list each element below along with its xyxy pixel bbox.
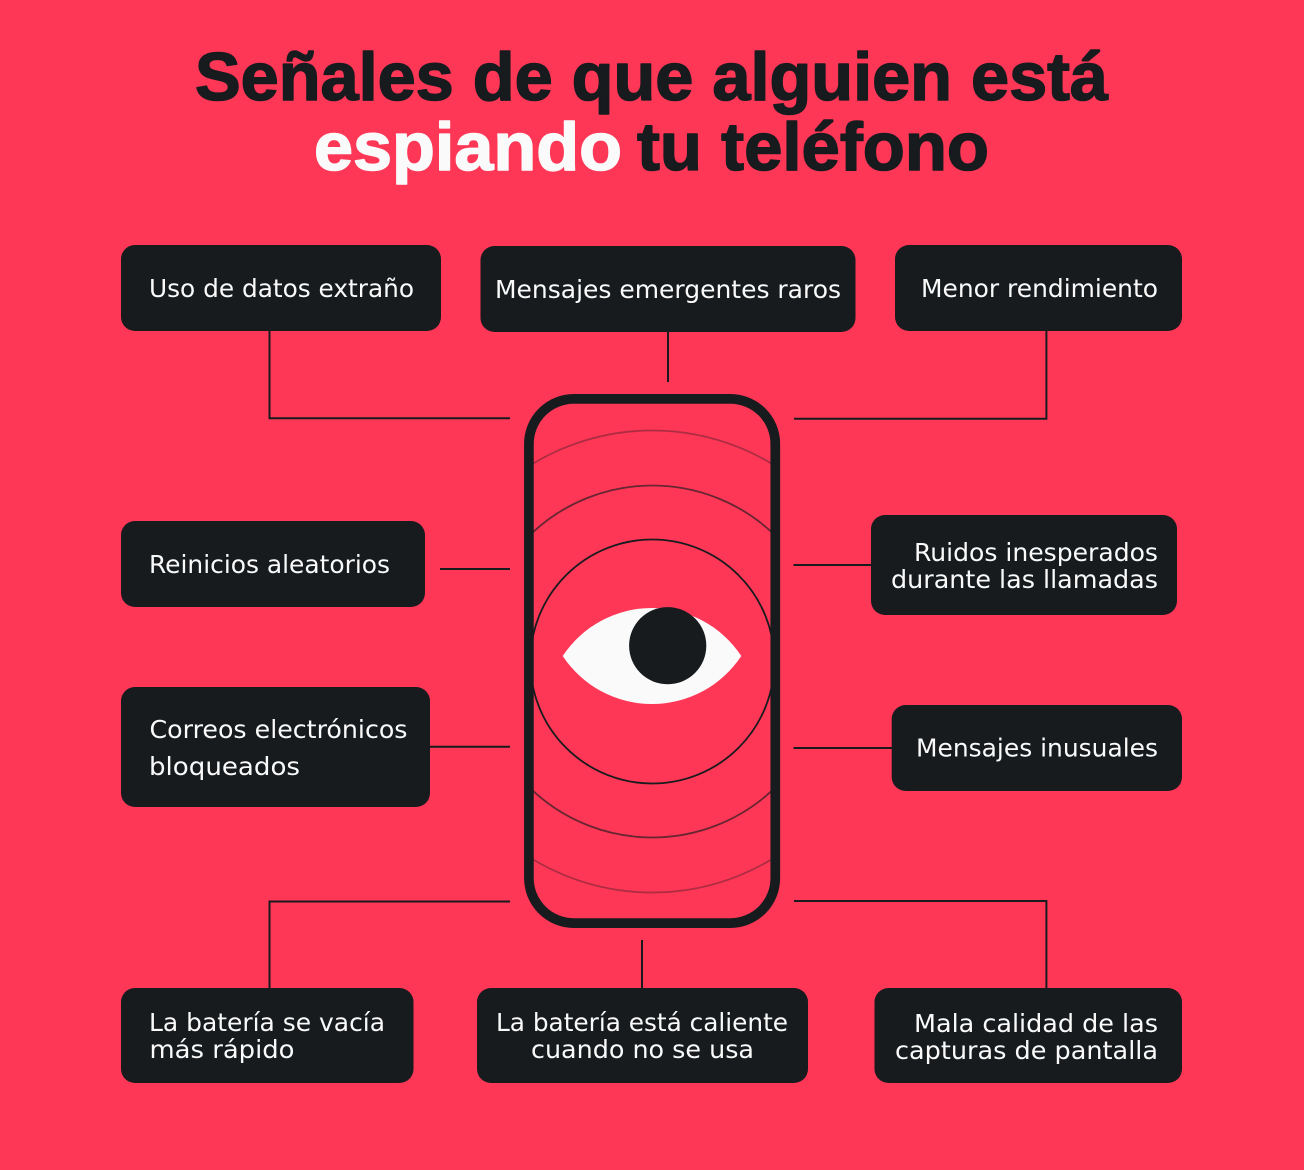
panel: mensajes emergentes raros: Mensajes emergentes raros (495, 275, 841, 304)
panel: mensajes emergentes raros (480, 246, 856, 332)
panel: la batería se vacía más rápido: La batería se vacía (149, 1008, 385, 1037)
panel: mala calidad de las capturas de pantalla: capturas de pantalla (895, 1036, 1158, 1065)
icon: eye (563, 607, 741, 704)
panel: la batería se vacía más rápido: más rápido (150, 1035, 294, 1064)
panel: la batería está caliente cuando no se usa: La batería está caliente (496, 1008, 788, 1037)
connector: uso de datos (270, 331, 510, 418)
panel: uso de datos extraño (121, 245, 441, 331)
panel: la batería se vacía más rápido (121, 988, 414, 1083)
connector: capturas (794, 901, 1046, 988)
title: Señales de que alguien está (195, 39, 1108, 115)
connector: mensajes emergentes (667, 332, 669, 382)
panel: menor rendimiento (895, 245, 1182, 331)
title: espiando (314, 109, 622, 185)
phone illustration (524, 394, 780, 928)
panel: ruidos inesperados durante las llamadas (871, 515, 1177, 615)
panel: mensajes inusuales (892, 705, 1182, 791)
panel: ruidos inesperados durante las llamadas: durante las llamadas (891, 565, 1158, 594)
panel: correos electrónicos bloqueados: bloqueados (149, 752, 300, 781)
panel: mala calidad de las capturas de pantalla: Mala calidad de las (914, 1009, 1158, 1038)
connector: mensajes inusuales (794, 747, 892, 749)
panel: reinicios aleatorios (121, 521, 425, 607)
panel: correos electrónicos bloqueados (121, 687, 430, 807)
panel: la batería está caliente cuando no se usa (477, 988, 808, 1083)
signal rings (534, 430, 770, 894)
title (195, 39, 1108, 185)
connector: correos (430, 746, 510, 748)
phone outline (529, 399, 775, 923)
panel: correos electrónicos bloqueados: Correos electrónicos (150, 715, 408, 744)
panel: menor rendimiento: Menor rendimiento (921, 274, 1158, 303)
panel: mala calidad de las capturas de pantalla (874, 988, 1182, 1083)
panel: uso de datos extraño: Uso de datos extraño (149, 274, 414, 303)
title: tu teléfono (637, 109, 989, 185)
panel: la batería está caliente cuando no se usa: cuando no se usa (531, 1035, 754, 1064)
connector: batería caliente (641, 940, 643, 988)
panel: ruidos inesperados durante las llamadas: Ruidos inesperados (914, 538, 1158, 567)
panel: mensajes inusuales: Mensajes inusuales (916, 734, 1158, 762)
connector: batería se vacía (270, 902, 510, 988)
connector: menor rendimiento (794, 331, 1046, 419)
connector: reinicios (440, 568, 510, 570)
panel: reinicios aleatorios: Reinicios aleatorios (149, 550, 390, 579)
connector: ruidos (794, 564, 871, 566)
